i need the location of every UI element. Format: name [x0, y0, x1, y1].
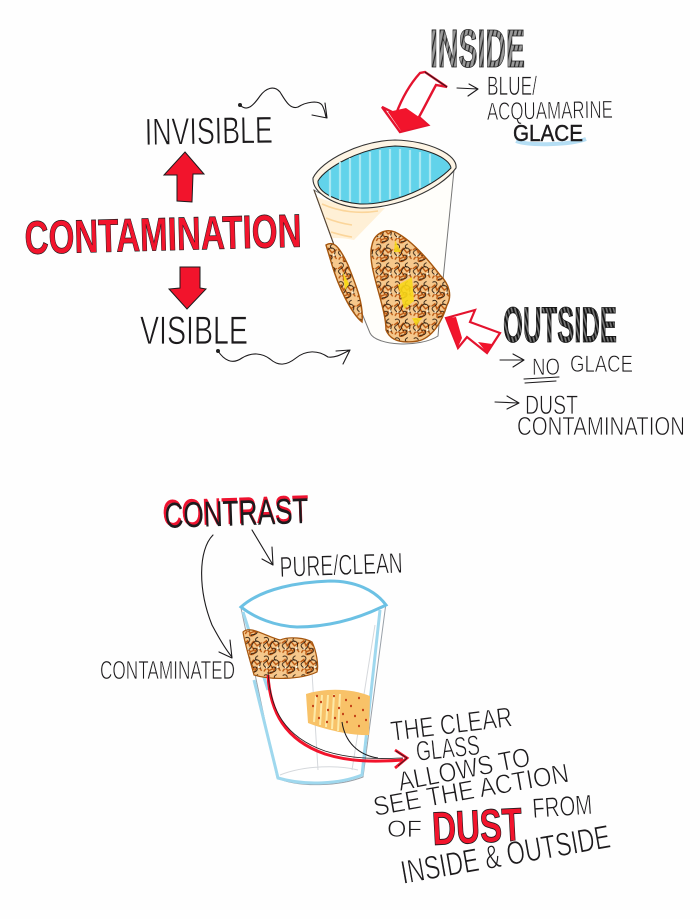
arrow: squiggle from visible to cup [216, 349, 350, 364]
label: visible: VISIBLE [140, 309, 248, 353]
arrow: squiggle from invisible to cup [238, 88, 327, 118]
text: glace: GLACE [513, 120, 583, 146]
blue glaze [318, 146, 451, 204]
glass outline [241, 603, 386, 785]
arrow: contrast to pure/clean [252, 530, 273, 565]
text: acquamarine: ACQUAMARINE [487, 96, 613, 126]
heading: contrast: CONTRAST [162, 488, 309, 534]
arrow: red from outside to cup [446, 310, 500, 353]
text: allows to: ALLOWS TO [395, 742, 533, 797]
arrow: to no glace [500, 354, 524, 367]
heading: inside: INSIDE [430, 19, 525, 79]
arrow: to blue text [457, 84, 478, 96]
arrow: contrast to contaminated [202, 535, 232, 658]
blue highlight behind glace [516, 139, 586, 144]
arrow: to dust contamination [495, 396, 519, 409]
glass blue edges [243, 610, 380, 783]
text: pure/clean: PURE/CLEAN [279, 548, 403, 584]
dust patch: inner band-aid [306, 690, 370, 735]
text: glass: GLASS [414, 729, 481, 767]
dust patch: large [371, 231, 450, 342]
text: inside & outside: INSIDE & OUTSIDE [398, 818, 613, 891]
label: invisible: INVISIBLE [144, 110, 273, 154]
heading: contamination: CONTAMINATION [24, 204, 302, 264]
text: no glace [524, 351, 633, 383]
arrow: red up to invisible [164, 152, 204, 202]
arrow: red down to visible [169, 267, 206, 309]
arrow: red pointing into cup [382, 72, 447, 132]
text: contaminated: CONTAMINATED [100, 655, 235, 685]
text: see the action: SEE THE ACTION [371, 758, 571, 822]
text: dust highlighted in red: DUST [431, 797, 524, 855]
text: from: FROM [531, 789, 593, 824]
cup rim [313, 140, 456, 208]
cup body [314, 170, 454, 344]
glass rim [241, 581, 386, 627]
text: the clear: THE CLEAR [389, 701, 514, 747]
dust patch: left edge [326, 244, 362, 322]
text: blue / acquamarine: BLUE/ [487, 71, 537, 101]
glass pencil lines [280, 625, 375, 775]
cup: dusty cup with blue glaze inside [313, 140, 456, 344]
text: no glace: GLACE [570, 351, 633, 378]
text: of: OF [387, 816, 422, 843]
text: no glace: NO [532, 354, 560, 381]
heading: contrast: CONTRAST [164, 490, 309, 536]
cup: clear glass [241, 581, 386, 785]
dust patch: outer [243, 630, 318, 678]
cup orange shading [317, 197, 385, 240]
arrow: red from stains to explanation [268, 672, 407, 768]
text: dust: DUST [525, 390, 578, 420]
